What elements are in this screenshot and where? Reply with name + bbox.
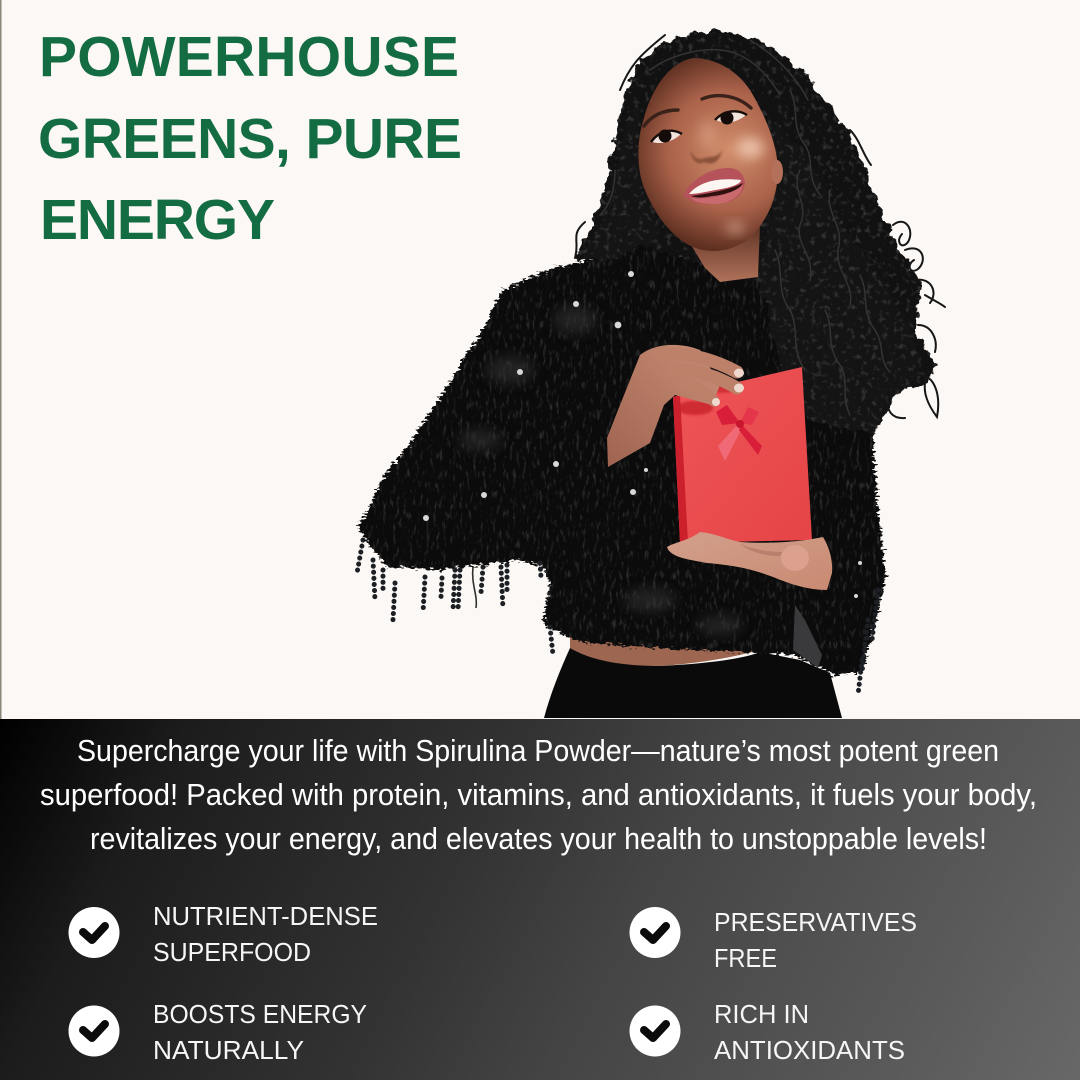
description text: superfood! Packed with protein, vitamins, and antioxidants, it fuels your body, xyxy=(40,778,1037,812)
photo background xyxy=(0,0,1080,720)
benefit: boosts energy naturally xyxy=(68,999,367,1065)
mouth xyxy=(683,168,745,204)
hair: curl highlights xyxy=(600,40,890,415)
midriff skin xyxy=(570,620,762,667)
cheek highlights xyxy=(736,137,764,159)
title: ENERGY xyxy=(40,188,275,252)
panel: dark description and benefits xyxy=(0,719,1080,1080)
benefit: rich in antioxidants: ANTIOXIDANTS xyxy=(714,1035,905,1065)
eyes xyxy=(652,112,746,143)
description text xyxy=(40,734,1037,856)
benefit: rich in antioxidants xyxy=(630,999,905,1065)
benefit: rich in antioxidants: RICH IN xyxy=(714,999,809,1029)
title: GREENS, PURE xyxy=(38,107,462,171)
benefit: boosts energy naturally: BOOSTS ENERGY xyxy=(153,999,367,1029)
red gift box xyxy=(673,367,812,543)
hair: back mass xyxy=(575,32,935,432)
sweater: sequins xyxy=(423,271,862,598)
description text: Supercharge your life with Spirulina Powder—nature’s most potent green xyxy=(77,734,999,768)
loose curls xyxy=(575,35,945,418)
benefit: preservatives free: PRESERVATIVES xyxy=(714,907,917,937)
neck xyxy=(688,225,760,282)
ribbon bow xyxy=(716,405,762,461)
benefit: nutrient-dense superfood xyxy=(68,901,378,967)
ear xyxy=(771,160,783,184)
benefit: preservatives free xyxy=(630,907,917,973)
nose xyxy=(690,150,722,164)
benefit: nutrient-dense superfood: NUTRIENT-DENSE xyxy=(153,901,378,931)
hair: front strands over shoulder xyxy=(580,100,920,432)
title: POWERHOUSE xyxy=(39,25,459,89)
title xyxy=(38,25,462,252)
upper hand and fingers xyxy=(607,345,744,467)
sweater: soft highlights xyxy=(458,306,742,635)
sweater xyxy=(357,245,886,695)
eyebrows xyxy=(644,96,751,126)
sweater: beaded sleeve fringe xyxy=(357,540,878,695)
finger shadow xyxy=(677,401,713,415)
description text: revitalizes your energy, and elevates your health to unstoppable levels! xyxy=(90,822,987,856)
sweater: cuff lining xyxy=(793,605,822,668)
benefit: boosts energy naturally: NATURALLY xyxy=(153,1035,304,1065)
benefit: nutrient-dense superfood: SUPERFOOD xyxy=(153,937,311,967)
lower hand xyxy=(667,532,832,590)
benefit: preservatives free: FREE xyxy=(714,943,777,973)
photo: woman holding a red gift box xyxy=(357,32,945,718)
face xyxy=(638,58,783,251)
black trousers xyxy=(544,648,842,718)
